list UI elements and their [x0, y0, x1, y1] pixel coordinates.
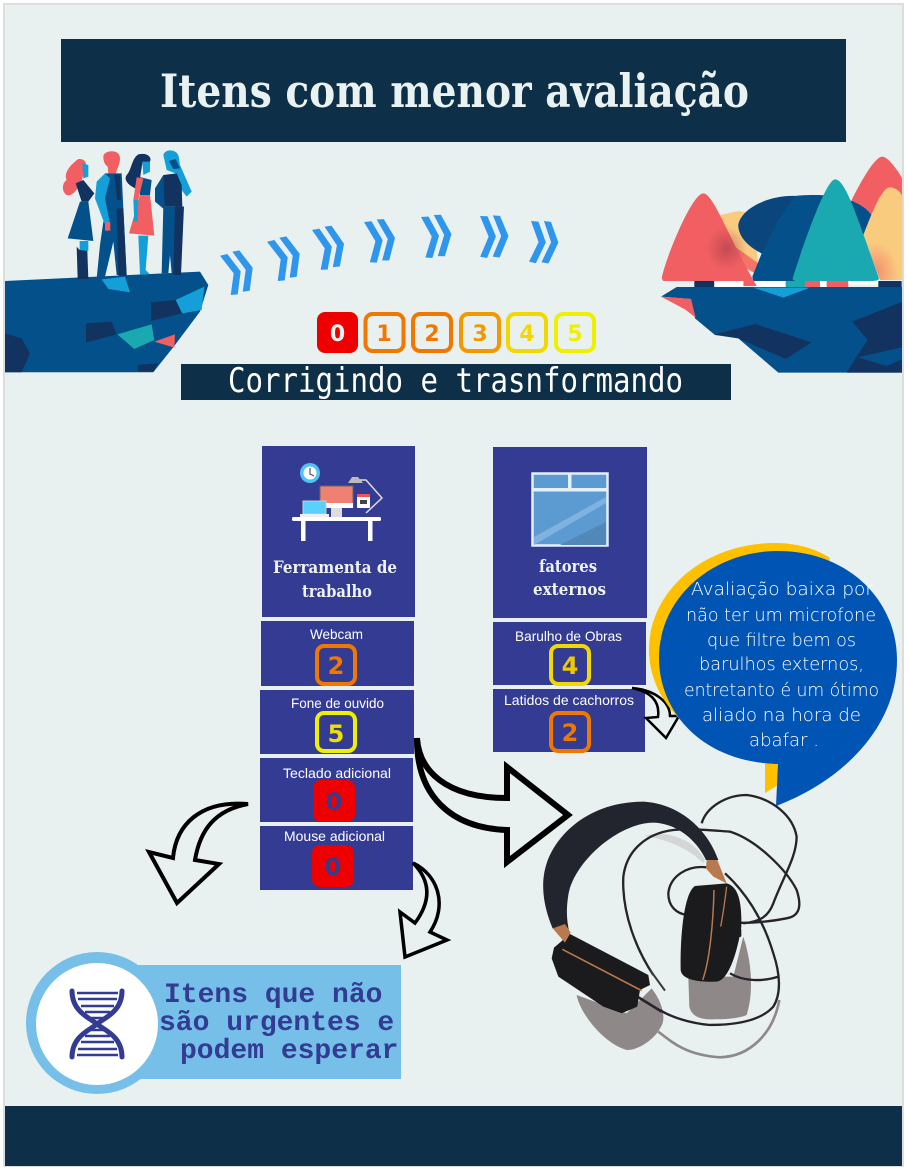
- speech bubble callout: [649, 543, 897, 806]
- woman 1: [63, 159, 94, 279]
- arrow: small to speech bubble: [632, 688, 679, 738]
- panel: work tools header: Ferramenta de: [273, 558, 397, 577]
- rating scale 0 to 5: 3: [472, 322, 488, 347]
- item: Fone de ouvido: [260, 690, 414, 754]
- title banner: [61, 39, 846, 142]
- speech bubble callout: não ter um microfone: [686, 605, 876, 626]
- title banner: Itens com menor avaliação: [160, 64, 749, 118]
- item: Latidos de cachorros: Latidos de cachorros: [504, 692, 634, 708]
- chevron arrows: [220, 211, 564, 295]
- speech bubble callout: entretanto é um ótimo: [684, 680, 879, 701]
- callout: items not urgent: podem esperar: [180, 1036, 398, 1067]
- item: Barulho de Obras: [493, 622, 646, 685]
- subtitle banner: Corrigindo e trasnformando: [228, 361, 683, 401]
- rating scale 0 to 5: 0: [330, 322, 345, 347]
- item: Webcam: Webcam: [310, 626, 363, 642]
- speech bubble callout: Avaliação baixa por: [691, 579, 874, 600]
- panel: work tools header: [262, 446, 415, 617]
- speech bubble callout: que filtre bem os: [707, 630, 856, 651]
- item: Fone de ouvido: 5: [328, 720, 344, 748]
- rating scale 0 to 5: 1: [376, 322, 392, 347]
- rating scale 0 to 5: [317, 312, 594, 353]
- icon: window: [532, 473, 608, 546]
- speech bubble callout: abafar .: [749, 730, 819, 751]
- item: Barulho de Obras: 4: [562, 652, 578, 680]
- item: Teclado adicional: [260, 758, 413, 822]
- rating scale 0 to 5: 4: [519, 322, 535, 347]
- item: Barulho de Obras: Barulho de Obras: [515, 628, 622, 644]
- callout: items not urgent: Itens que não: [164, 980, 382, 1011]
- arrow: large to headphones: [417, 738, 568, 862]
- panel: work tools header: trabalho: [302, 582, 372, 601]
- arrow: small below mouse: [400, 863, 447, 957]
- item: Teclado adicional: 0: [326, 788, 342, 816]
- item: Latidos de cachorros: 2: [562, 719, 578, 747]
- item: Webcam: [261, 621, 414, 686]
- man 2: [95, 151, 127, 278]
- callout: items not urgent: são urgentes e: [159, 1008, 394, 1039]
- man 4: [155, 150, 192, 275]
- woman 3: [126, 154, 154, 274]
- arrow: left curved: [149, 804, 248, 903]
- item: Webcam: 2: [328, 652, 344, 680]
- callout: items not urgent: [26, 952, 401, 1094]
- speech bubble callout: aliado na hora de: [702, 705, 861, 726]
- panel: external factors header: [493, 447, 647, 618]
- footer bar: [5, 1106, 902, 1166]
- panel: external factors header: fatores: [539, 557, 597, 576]
- item: Teclado adicional: Teclado adicional: [283, 765, 391, 781]
- photo: headphones: [543, 795, 799, 1057]
- item: Mouse adicional: [260, 826, 413, 890]
- illustration: floating island with trees: [661, 157, 902, 373]
- item: Mouse adicional: 0: [325, 853, 341, 881]
- item: Fone de ouvido: Fone de ouvido: [291, 695, 384, 711]
- panel: external factors header: externos: [533, 580, 606, 599]
- rating scale 0 to 5: 2: [424, 322, 440, 347]
- icon: desk: [292, 463, 382, 541]
- item: Mouse adicional: Mouse adicional: [284, 828, 385, 844]
- illustration: people on a cliff: [5, 150, 208, 372]
- speech bubble callout: barulhos externos,: [699, 654, 864, 675]
- item: Latidos de cachorros: [493, 689, 645, 752]
- rating scale 0 to 5: 5: [567, 322, 583, 347]
- icon: DNA: [72, 991, 122, 1057]
